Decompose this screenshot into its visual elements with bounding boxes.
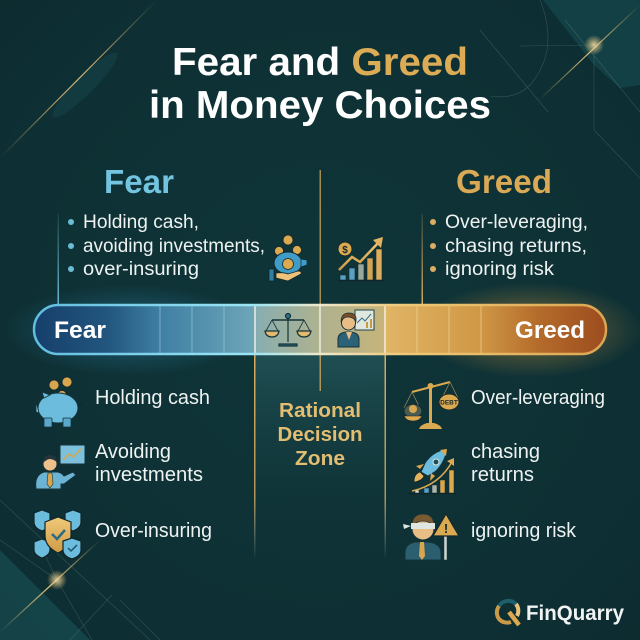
label: Rational Decision Zone: Rational: [279, 399, 361, 422]
list: greed bullets: chasing returns,: [445, 236, 587, 257]
title: in Money Choices: [149, 84, 491, 127]
label: Rational Decision Zone: [278, 399, 362, 470]
title: [149, 41, 491, 127]
list: fear bullets: Holding cash,: [83, 212, 199, 233]
gauge bar: [20, 286, 634, 374]
bar dividers: [160, 305, 481, 354]
label: Avoiding investments: investments: [95, 464, 203, 486]
label: ignoring risk: ignoring risk: [471, 520, 577, 542]
connector lines: [58, 170, 423, 560]
logo mark: [497, 601, 519, 625]
list: greed bullets: ignoring risk: [445, 259, 555, 280]
list: greed bullets: [430, 212, 588, 280]
icon: blindfolded man with warning sign: !: [444, 521, 448, 536]
logo: FinQuarry: [497, 601, 624, 625]
label: chasing returns: chasing: [471, 441, 540, 463]
rational zone band: [255, 355, 385, 560]
icon: debt scale: DEBT: [440, 400, 458, 406]
label: Avoiding investments: Avoiding: [95, 441, 171, 463]
icon: man pondering chart: [36, 445, 85, 489]
icon: rocket and bars: [408, 449, 457, 494]
label: chasing returns: returns: [471, 464, 534, 486]
label: Rational Decision Zone: Zone: [295, 447, 345, 470]
icon: piggy bank: [36, 377, 82, 427]
label: Over-insuring: Over-insuring: [95, 520, 212, 542]
icon: debt scale: [404, 382, 459, 429]
bar label: Fear: Fear: [54, 317, 106, 344]
icon: blindfolded man with warning sign: [403, 514, 459, 560]
label: Over-leveraging: Over-leveraging: [471, 387, 605, 409]
icon: shields: [34, 510, 81, 559]
logo text: FinQuarry: [526, 602, 624, 625]
list: fear bullets: [68, 212, 265, 280]
heading: Fear: Fear: [104, 163, 174, 200]
bar label: Greed: Greed: [515, 317, 585, 344]
label: Holding cash: Holding cash: [95, 387, 210, 409]
heading: Greed: Greed: [456, 163, 552, 200]
title: Fear and Greed: [172, 41, 468, 84]
icon: balance scale: [265, 314, 311, 346]
icon: advisor with chart: [338, 310, 374, 347]
label: Avoiding investments: [95, 441, 203, 486]
icon: rising chart with coin: [338, 237, 384, 281]
label: chasing returns: [471, 441, 540, 486]
list: fear bullets: over-insuring: [83, 259, 199, 280]
icon: rising chart with coin: $: [342, 245, 348, 256]
icon: hand holding piggy bank with coins: [269, 235, 307, 281]
list: greed bullets: Over-leveraging,: [445, 212, 588, 233]
label: Rational Decision Zone: Decision: [278, 423, 362, 446]
list: fear bullets: avoiding investments,: [83, 236, 265, 257]
